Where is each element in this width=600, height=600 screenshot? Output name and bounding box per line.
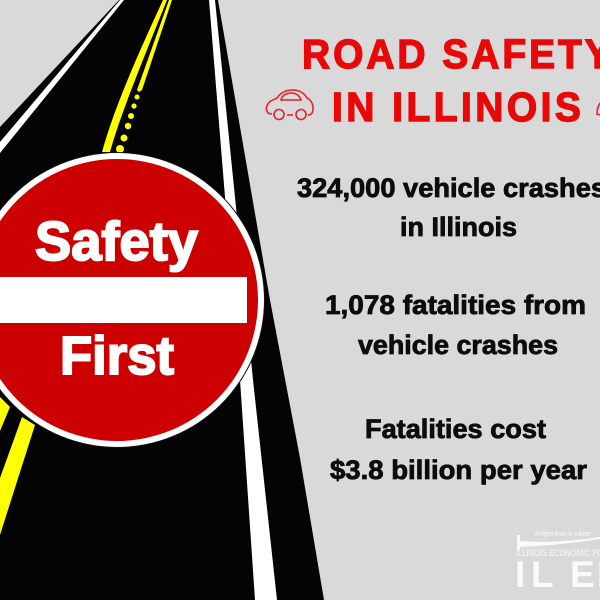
yellow centre line dashed — [0, 0, 172, 431]
right road edge line — [209, 0, 277, 600]
stat: vehicle crashes: 324,000 vehicle crashes — [297, 173, 600, 203]
road — [0, 0, 324, 600]
stat: cost: $3.8 billion per year — [330, 455, 587, 485]
sign bar — [0, 277, 247, 323]
sign text: First: First — [60, 326, 174, 386]
icon: car — [266, 90, 313, 120]
stat: fatalities: vehicle crashes — [358, 330, 558, 360]
yellow centre line solid — [0, 0, 167, 535]
stat: vehicle crashes — [297, 173, 600, 242]
stat: cost — [330, 414, 587, 485]
title: IN ILLINOIS — [332, 85, 581, 130]
icon: clipped car at right edge — [597, 103, 600, 115]
sign text: Safety: Safety — [35, 210, 198, 272]
logo: ILEPI — [515, 531, 600, 595]
stat: fatalities — [325, 290, 586, 360]
title — [302, 32, 600, 130]
stat: vehicle crashes: in Illinois — [400, 212, 517, 242]
left road edge line — [0, 0, 124, 153]
safety first sign — [0, 152, 265, 448]
stat: cost: Fatalities cost — [365, 414, 546, 444]
stat: fatalities: 1,078 fatalities from — [325, 290, 586, 320]
